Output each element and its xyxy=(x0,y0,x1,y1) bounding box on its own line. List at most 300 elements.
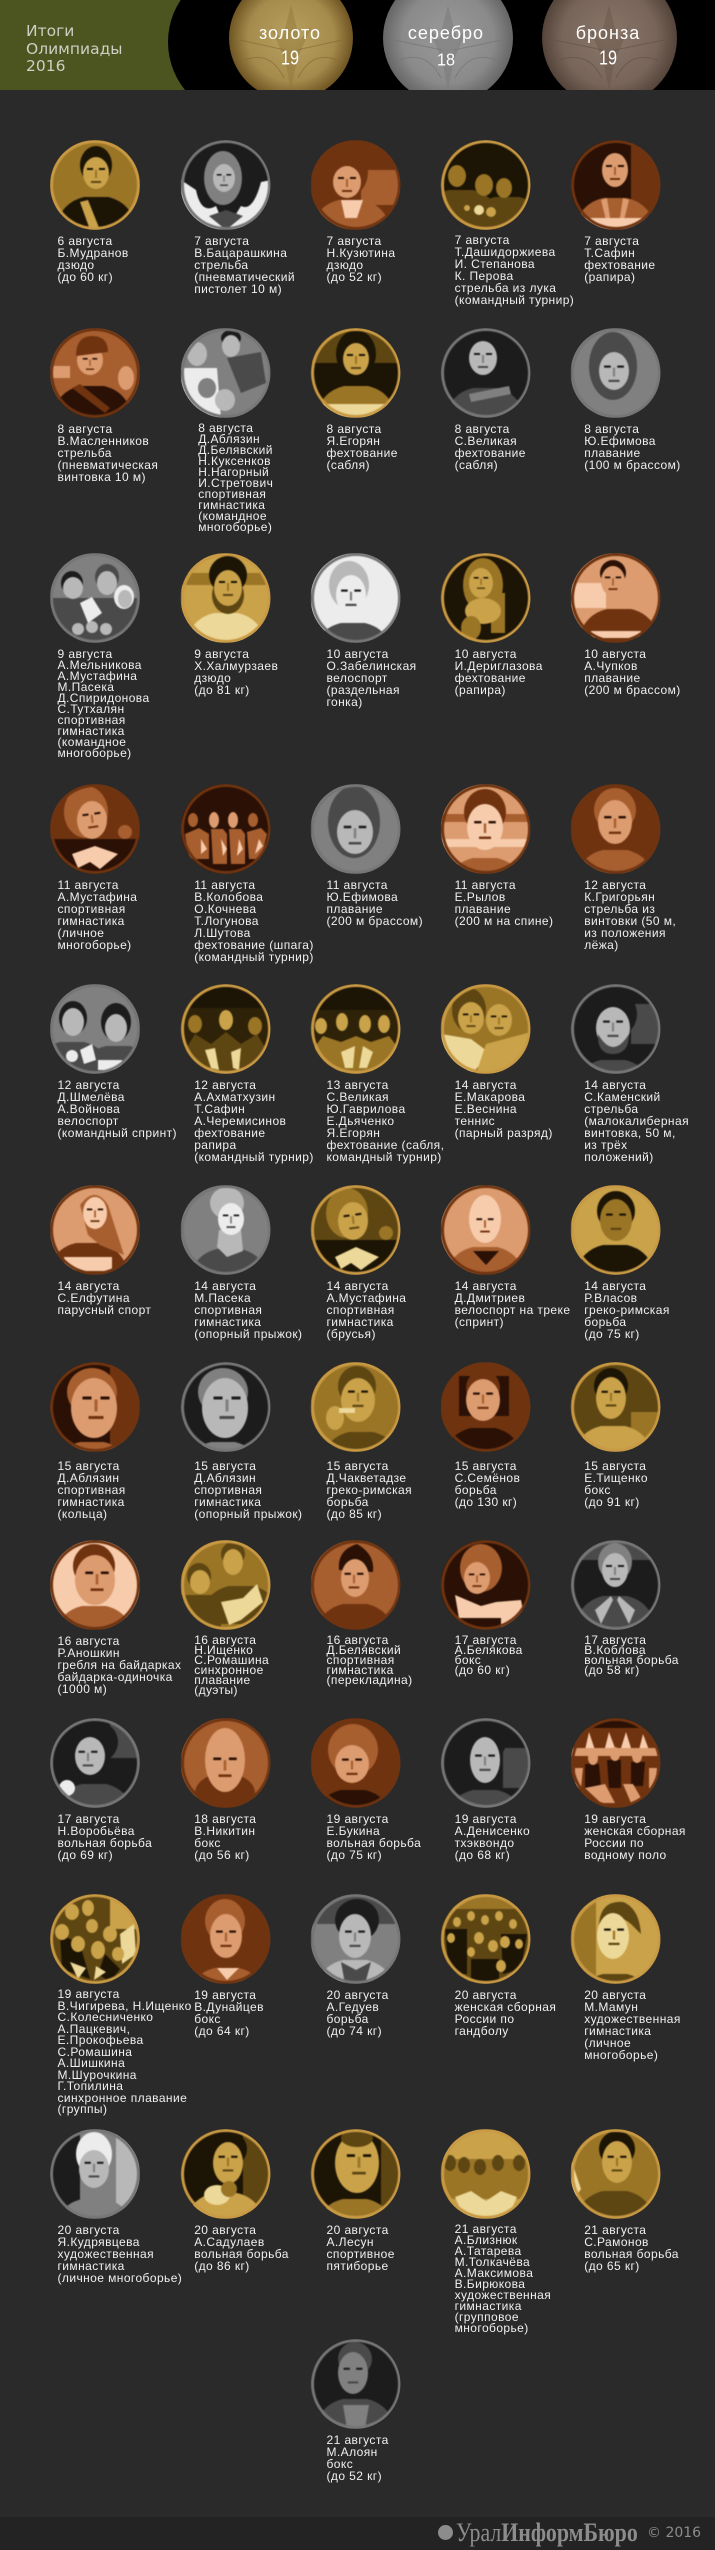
caption: 19 августа xyxy=(194,1988,256,2002)
caption: (до 81 кг) xyxy=(194,683,250,697)
caption xyxy=(455,647,543,697)
caption: вольная борьба xyxy=(58,1836,152,1850)
caption: В.Никитин xyxy=(194,1824,255,1838)
bronze medal xyxy=(542,0,677,106)
caption: Т.Сафин xyxy=(194,1102,245,1116)
caption: гонка) xyxy=(326,695,363,709)
caption: Д.Спиридонова xyxy=(58,691,150,705)
portrait xyxy=(50,984,140,1074)
caption: Ю.Ефимова xyxy=(584,434,656,448)
caption: борьба xyxy=(584,1315,626,1329)
portrait xyxy=(440,984,530,1074)
caption: гребля на байдарках xyxy=(58,1658,181,1672)
caption: (групповое xyxy=(455,2310,519,2324)
caption: 12 августа xyxy=(194,1078,256,1092)
caption: Т.Сафин xyxy=(584,246,635,260)
caption: Л.Шутова xyxy=(194,926,251,940)
caption: дзюдо xyxy=(326,258,364,272)
card: Аблязин, команда xyxy=(180,328,273,534)
caption: 7 августа xyxy=(455,233,510,247)
gold medal: 19 xyxy=(281,46,299,70)
caption xyxy=(194,2224,310,2272)
portrait xyxy=(180,140,270,230)
caption: велоспорт xyxy=(58,1114,119,1128)
caption: 7 августа xyxy=(584,234,639,248)
portrait xyxy=(50,1894,140,1984)
card: Белявский xyxy=(310,1540,440,1685)
caption: фехтование xyxy=(194,1126,266,1140)
portrait xyxy=(440,784,530,874)
caption: байдарка-одиночка xyxy=(58,1670,173,1684)
caption: 7 августа xyxy=(194,234,249,248)
caption: (перекладина) xyxy=(326,1673,413,1687)
caption: Н.Куксенков xyxy=(198,454,271,468)
caption xyxy=(584,234,656,284)
caption: бокс xyxy=(455,1653,481,1667)
caption xyxy=(455,1460,570,1508)
card: Гедуев xyxy=(310,1894,440,2037)
caption: Я.Егорян xyxy=(326,1126,380,1140)
card: Кузютина xyxy=(310,140,400,284)
caption: 8 августа xyxy=(584,422,639,436)
portrait xyxy=(310,1718,400,1808)
caption: стрельба xyxy=(194,258,249,272)
caption: 21 августа xyxy=(326,2433,389,2447)
caption: В.Дунайцев xyxy=(194,2000,264,2014)
caption: борьба xyxy=(326,1495,369,1509)
caption xyxy=(58,1460,180,1520)
caption: С.Ромашина xyxy=(58,2044,132,2058)
caption: А.Максимова xyxy=(455,2266,533,2280)
caption: 11 августа xyxy=(194,878,256,892)
caption: рапира xyxy=(194,1138,237,1152)
portrait xyxy=(180,1894,270,1984)
caption xyxy=(58,647,150,760)
caption: бокс xyxy=(326,2457,353,2471)
caption: бокс xyxy=(194,2012,221,2026)
card: Великая, команда xyxy=(310,984,444,1164)
caption: А.Войнова xyxy=(58,1102,120,1116)
caption: велоспорт на треке xyxy=(455,1303,570,1317)
card: Мамун xyxy=(570,1894,700,2061)
caption: гимнастика xyxy=(326,1663,394,1677)
card: Семёнов xyxy=(440,1362,570,1508)
portrait xyxy=(50,2129,140,2219)
portrait xyxy=(570,1718,660,1808)
caption: А.Близнюк xyxy=(455,2233,518,2247)
caption: (200 м брассом) xyxy=(326,914,423,928)
portrait xyxy=(440,1718,530,1808)
caption: (до 130 кг) xyxy=(455,1495,517,1509)
caption: (брусья) xyxy=(326,1327,376,1341)
caption: М.Толкачёва xyxy=(455,2255,530,2269)
caption: 14 августа xyxy=(194,1279,256,1293)
card: Денисенко xyxy=(440,1718,570,1861)
title: Итоги xyxy=(26,22,74,40)
card: Аблязин, кольца xyxy=(50,1362,180,1520)
portrait xyxy=(570,1362,660,1452)
caption: (до 52 кг) xyxy=(326,2469,382,2483)
caption: 11 августа xyxy=(58,878,119,892)
caption xyxy=(455,878,553,928)
card: Каменский xyxy=(570,984,689,1164)
caption: 15 августа xyxy=(455,1459,517,1473)
card: Шмелёва xyxy=(50,984,177,1140)
caption: фехтование xyxy=(584,258,656,272)
caption: С.Рамонов xyxy=(584,2235,649,2249)
caption: фехтование (шпага) xyxy=(194,938,314,952)
caption: бокс xyxy=(194,1836,221,1850)
caption xyxy=(326,1635,440,1685)
caption: А.Мустафина xyxy=(58,890,137,904)
card: Ефимова 100 м xyxy=(570,328,681,472)
caption: М.Пасека xyxy=(194,1291,251,1305)
caption: М.Алоян xyxy=(326,2445,378,2459)
caption: (до 86 кг) xyxy=(194,2259,250,2273)
caption xyxy=(454,1078,553,1140)
caption xyxy=(194,1813,310,1861)
caption: А.Чупков xyxy=(584,659,638,673)
portrait xyxy=(310,1185,400,1275)
caption: из положения xyxy=(584,926,666,940)
gold medal: золото xyxy=(259,23,321,43)
caption: спортивная xyxy=(194,1303,262,1317)
caption: 10 августа xyxy=(455,647,517,661)
card: синхронное плавание, группы xyxy=(50,1894,180,2116)
copyright: © 2016 xyxy=(647,2525,701,2541)
footer xyxy=(0,2517,715,2550)
card: Сафин xyxy=(570,140,660,284)
caption xyxy=(455,1989,570,2037)
caption: В.Масленников xyxy=(58,434,149,448)
caption xyxy=(58,1813,180,1861)
caption: А.Садулаев xyxy=(194,2235,265,2249)
caption: 8 августа xyxy=(326,422,382,436)
caption: (рапира) xyxy=(584,270,635,284)
caption: Е.Дьяченко xyxy=(326,1114,395,1128)
caption: 16 августа xyxy=(194,1633,256,1647)
caption: 7 августа xyxy=(326,234,382,248)
caption xyxy=(326,878,423,928)
caption: 20 августа xyxy=(584,1988,646,2002)
portrait xyxy=(570,553,660,643)
caption: 8 августа xyxy=(455,422,510,436)
caption: 18 августа xyxy=(194,1812,256,1826)
caption: 8 августа xyxy=(58,422,113,436)
silver medal: серебро xyxy=(408,23,484,43)
card: Власов xyxy=(570,1185,700,1340)
portrait xyxy=(570,1540,660,1630)
caption: Д.Аблязин xyxy=(194,1471,256,1485)
caption: пятиборье xyxy=(326,2259,389,2273)
caption: Е.Веснина xyxy=(455,1102,517,1116)
caption: В.Бирюкова xyxy=(455,2277,525,2291)
caption: (200 м на спине) xyxy=(455,914,553,928)
caption: Т.Логунова xyxy=(194,914,259,928)
caption xyxy=(58,1078,177,1140)
caption: греко-римская xyxy=(584,1303,670,1317)
portrait xyxy=(570,140,660,230)
card: Масленников xyxy=(50,328,158,484)
caption: (пневматический xyxy=(194,270,295,284)
caption xyxy=(584,422,681,472)
caption: (до 69 кг) xyxy=(58,1848,113,1862)
caption: Н.Воробьёва xyxy=(58,1824,135,1838)
caption: (группы) xyxy=(58,2102,107,2116)
portrait xyxy=(180,1540,270,1630)
caption: Х.Халмурзаев xyxy=(194,659,278,673)
caption: 12 августа xyxy=(58,1078,120,1092)
silver medal: 18 xyxy=(437,50,455,70)
caption xyxy=(584,1280,700,1340)
caption: К.Григорьян xyxy=(584,890,655,904)
caption: Е.Макарова xyxy=(455,1090,525,1104)
caption: В.Колобова xyxy=(194,890,263,904)
caption xyxy=(326,2224,440,2272)
caption xyxy=(326,1280,440,1340)
caption: Ю.Гаврилова xyxy=(326,1102,406,1116)
portrait xyxy=(50,553,140,643)
caption: В.Коблова xyxy=(584,1643,646,1657)
caption: гимнастика xyxy=(194,1315,261,1329)
caption: художественная xyxy=(58,2247,154,2261)
caption: плавание xyxy=(584,446,641,460)
caption xyxy=(194,1460,310,1520)
caption: А.Шишкина xyxy=(58,2056,125,2070)
caption: спортивная xyxy=(194,1483,262,1497)
caption: Г.Топилина xyxy=(58,2079,123,2093)
caption: 14 августа xyxy=(455,1078,517,1092)
caption xyxy=(584,1813,700,1861)
card: Дмитриев xyxy=(440,1185,570,1328)
caption xyxy=(584,2224,700,2272)
caption: (командный турнир) xyxy=(194,950,314,964)
caption: 15 августа xyxy=(194,1459,256,1473)
portrait xyxy=(50,140,140,230)
caption: спортивная xyxy=(58,902,126,916)
caption xyxy=(455,1280,570,1328)
caption: Я.Егорян xyxy=(326,434,380,448)
caption: гимнастика xyxy=(58,1495,125,1509)
card: Рамонов xyxy=(570,2129,700,2272)
card: Аношкин xyxy=(50,1540,180,1695)
caption: многоборье) xyxy=(58,938,132,952)
caption xyxy=(58,1635,180,1695)
caption: (дуэты) xyxy=(194,1683,238,1697)
caption: художественная xyxy=(455,2288,551,2302)
card: Великая xyxy=(440,328,530,472)
caption: 15 августа xyxy=(326,1459,389,1473)
card: Кудрявцева xyxy=(50,2129,180,2284)
caption: фехтование xyxy=(326,446,398,460)
caption: М.Мамун xyxy=(584,2000,638,2014)
caption: 15 августа xyxy=(584,1459,646,1473)
caption: Н.Нагорный xyxy=(198,465,269,479)
caption: (до 65 кг) xyxy=(584,2259,640,2273)
portrait xyxy=(570,2129,660,2219)
portrait xyxy=(180,1362,270,1452)
caption xyxy=(326,1078,444,1164)
caption: спортивная xyxy=(198,487,266,501)
caption: А.Мустафина xyxy=(58,669,137,683)
caption: 8 августа xyxy=(198,421,253,435)
caption xyxy=(326,647,417,709)
caption: Е.Букина xyxy=(326,1824,380,1838)
caption: Т.Дашидоржиева xyxy=(455,245,556,259)
portrait xyxy=(50,1185,140,1275)
caption: (сабля) xyxy=(326,458,370,472)
caption xyxy=(455,1813,570,1861)
caption: дзюдо xyxy=(194,671,231,685)
caption: теннис xyxy=(455,1114,495,1128)
caption: (100 м брассом) xyxy=(584,458,681,472)
caption: Ю.Ефимова xyxy=(326,890,398,904)
caption: С.Каменский xyxy=(584,1090,661,1104)
caption: (до 60 кг) xyxy=(58,270,113,284)
caption xyxy=(58,422,158,484)
bronze medal: бронза xyxy=(576,23,640,43)
caption: 13 августа xyxy=(326,1078,389,1092)
caption: стрельба из xyxy=(584,902,655,916)
portrait xyxy=(440,1185,530,1275)
caption: Д.Шмелёва xyxy=(58,1090,125,1104)
header band xyxy=(0,0,715,90)
caption: 16 августа xyxy=(326,1633,389,1647)
caption: 19 августа xyxy=(58,1987,120,2001)
caption: (малокалиберная xyxy=(584,1114,689,1128)
portrait xyxy=(310,1540,400,1630)
caption: гимнастика xyxy=(58,724,125,738)
caption: (опорный прыжок) xyxy=(194,1327,302,1341)
caption: гимнастика xyxy=(194,1495,261,1509)
caption: художественная xyxy=(584,2012,681,2026)
caption: Н.Ищенко xyxy=(194,1643,253,1657)
caption: лёжа) xyxy=(584,938,619,952)
caption: 10 августа xyxy=(584,647,646,661)
caption xyxy=(326,1989,440,2037)
portrait xyxy=(310,2129,400,2219)
caption: (раздельная xyxy=(326,683,400,697)
caption: (до 56 кг) xyxy=(194,1848,250,1862)
caption: 19 августа xyxy=(584,1812,646,1826)
caption: гимнастика xyxy=(326,1315,394,1329)
logo xyxy=(438,2519,638,2547)
portrait xyxy=(440,1540,530,1630)
portrait xyxy=(440,2129,530,2219)
caption: винтовки (50 м, xyxy=(584,914,676,928)
caption xyxy=(584,1989,700,2061)
caption xyxy=(455,422,526,472)
caption: спортивная xyxy=(326,1303,395,1317)
caption: Б.Мудранов xyxy=(58,246,129,260)
caption: 14 августа xyxy=(58,1279,120,1293)
portrait xyxy=(440,328,530,418)
caption: водному поло xyxy=(584,1848,667,1862)
card: Дунайцев xyxy=(180,1894,310,2037)
olive title panel xyxy=(0,0,190,90)
portrait xyxy=(50,1362,140,1452)
caption: (кольца) xyxy=(58,1507,107,1521)
card: Садулаев xyxy=(180,2129,310,2272)
caption: С.Елфутина xyxy=(58,1291,130,1305)
card: гандбол xyxy=(440,1894,570,2037)
caption: 15 августа xyxy=(58,1459,120,1473)
portrait xyxy=(180,1185,270,1275)
caption: (до 91 кг) xyxy=(584,1495,640,1509)
caption xyxy=(194,1078,314,1164)
caption xyxy=(455,2224,570,2334)
caption: борьба xyxy=(455,1483,497,1497)
card: Мустафина, многоборье xyxy=(50,784,140,952)
caption: положений) xyxy=(584,1150,654,1164)
caption: гандболу xyxy=(455,2024,509,2038)
card: Елфутина xyxy=(50,1185,151,1317)
caption: Е.Рылов xyxy=(455,890,506,904)
caption: (до 64 кг) xyxy=(194,2024,250,2038)
caption: (личное многоборье) xyxy=(58,2271,182,2285)
caption xyxy=(58,234,129,284)
caption: А.Лесун xyxy=(326,2235,374,2249)
caption xyxy=(198,421,273,534)
caption: фехтование xyxy=(455,446,526,460)
caption: (до 58 кг) xyxy=(584,1663,640,1677)
card: Воробьёва xyxy=(50,1718,180,1861)
caption: А.Мустафина xyxy=(326,1291,406,1305)
caption: (пневматическая xyxy=(58,458,158,472)
caption: тхэквондо xyxy=(455,1836,514,1850)
caption: Р.Аношкин xyxy=(58,1646,120,1660)
caption xyxy=(194,1635,310,1695)
caption: Е.Тищенко xyxy=(584,1471,648,1485)
caption: стрельба xyxy=(58,446,112,460)
card: Пасека xyxy=(180,1185,302,1341)
portrait xyxy=(310,1894,400,1984)
caption: 17 августа xyxy=(584,1633,646,1647)
card: Ищенко, Ромашина xyxy=(180,1540,310,1695)
card: Мудранов xyxy=(50,140,140,284)
silver medal xyxy=(383,0,513,103)
portrait xyxy=(180,2129,270,2219)
caption: гимнастика xyxy=(58,2259,125,2273)
caption: А.Гедуев xyxy=(326,2000,379,2014)
card: Мельникова, команда xyxy=(50,553,150,760)
caption: 20 августа xyxy=(326,1988,389,2002)
caption: многоборье) xyxy=(584,2048,658,2062)
caption: России по xyxy=(455,2012,514,2026)
caption xyxy=(58,2224,180,2284)
portrait xyxy=(180,784,270,874)
caption: спортивная xyxy=(326,1653,395,1667)
caption: России по xyxy=(584,1836,644,1850)
caption: С.Великая xyxy=(455,434,517,448)
caption: греко-римская xyxy=(326,1483,412,1497)
caption: О.Кочнева xyxy=(194,902,257,916)
caption: велоспорт xyxy=(326,671,388,685)
portrait xyxy=(570,1185,660,1275)
portrait xyxy=(310,984,400,1074)
caption: стрельба из лука xyxy=(455,281,556,295)
caption: М.Шурочкина xyxy=(58,2068,137,2082)
caption: 14 августа xyxy=(455,1279,517,1293)
caption: В.Бацарашкина xyxy=(194,246,287,260)
card: Дашидоржиева xyxy=(440,140,574,307)
caption: (личное xyxy=(58,926,104,940)
card: Егорян xyxy=(310,328,400,472)
caption xyxy=(194,1280,310,1340)
caption: плавание xyxy=(194,1673,251,1687)
caption xyxy=(584,1078,689,1164)
caption: многоборье) xyxy=(58,746,132,760)
